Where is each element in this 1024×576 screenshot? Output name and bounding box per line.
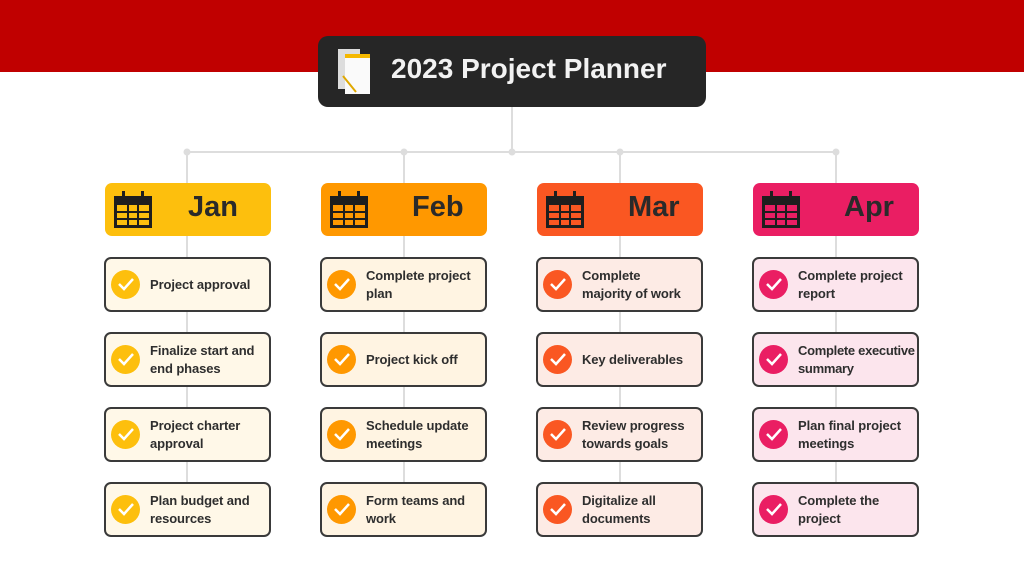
header: Mar: Mar (628, 191, 680, 223)
task: Key deliverables (582, 352, 683, 366)
task: Project kick off (366, 352, 458, 366)
task (536, 407, 703, 462)
task (536, 482, 703, 537)
header: Apr (753, 183, 919, 236)
red top band (0, 0, 1024, 72)
task: Schedule update meetings (366, 418, 469, 450)
task: Plan budget and resources (150, 492, 250, 526)
column: Apr (752, 183, 919, 537)
task: Digitalize all documents (582, 492, 656, 526)
task: Complete the project (798, 492, 879, 526)
task (752, 482, 919, 537)
task (104, 332, 271, 387)
header: Jan (105, 183, 271, 236)
task (752, 332, 919, 387)
task: Form teams and work (366, 492, 465, 526)
task (320, 332, 487, 387)
icon: notepad (338, 49, 370, 94)
title (318, 36, 706, 107)
task (320, 257, 487, 312)
task (536, 332, 703, 387)
column: Feb (320, 183, 487, 537)
task: Project charter approval (150, 418, 240, 450)
task: Plan final project meetings (798, 418, 901, 450)
task: Complete majority of work (582, 268, 681, 300)
task (320, 407, 487, 462)
header: Feb (321, 183, 487, 236)
task: Finalize start and end phases (150, 342, 254, 376)
task (752, 407, 919, 462)
header: Jan: Jan (188, 191, 238, 223)
column: Mar (536, 183, 703, 537)
task: Complete project plan (366, 268, 471, 300)
header: Feb: Feb (412, 191, 464, 223)
task: Project approval (150, 276, 250, 292)
task: Complete project report (798, 268, 903, 300)
header: Apr: Apr (844, 191, 894, 223)
task (104, 482, 271, 537)
task (104, 407, 271, 462)
task: Review progress towards goals (582, 418, 685, 450)
header: Mar (537, 183, 703, 236)
task (104, 257, 271, 312)
task (536, 257, 703, 312)
task (752, 257, 919, 312)
title: 2023 Project Planner (391, 53, 666, 84)
task: Complete executive summary (798, 342, 915, 376)
column: Jan (104, 183, 271, 537)
task (320, 482, 487, 537)
